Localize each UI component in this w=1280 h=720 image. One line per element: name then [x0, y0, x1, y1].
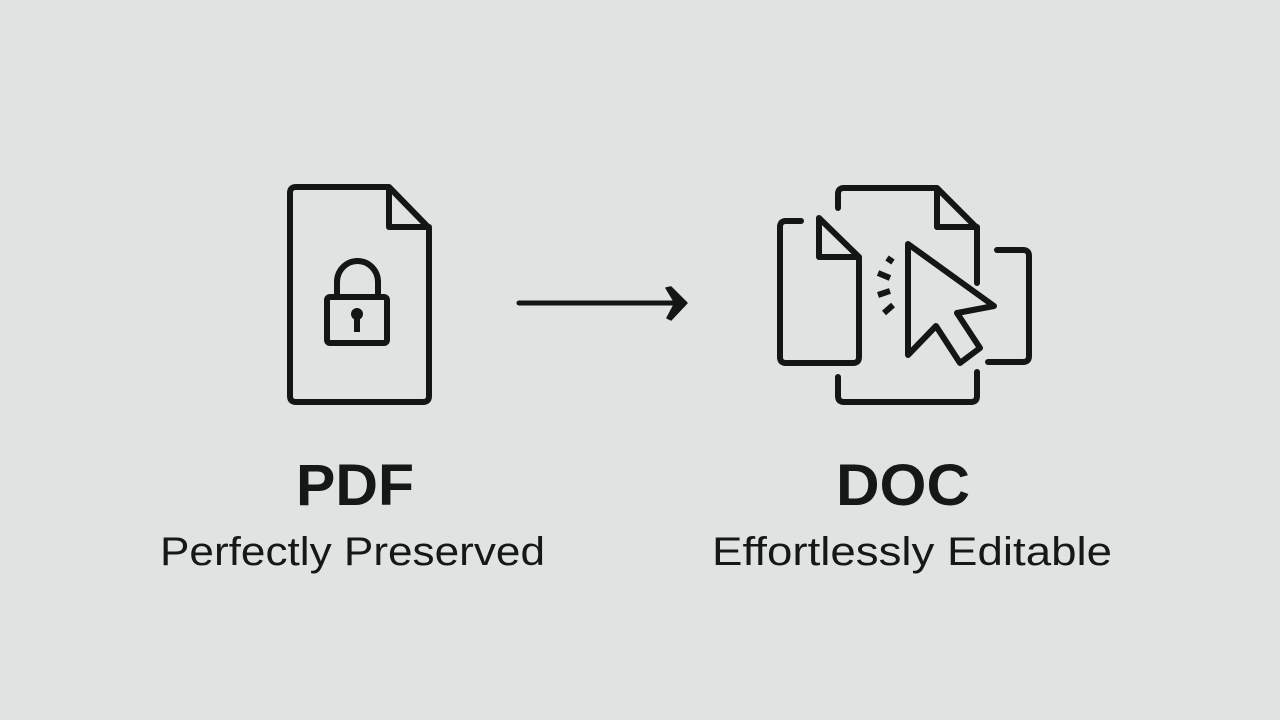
click ticks: [878, 258, 893, 313]
text: Perfectly Preserved: Perfectly Preserved: [160, 530, 545, 574]
heading: DOC: DOC: [836, 453, 970, 518]
arrow: PDF to DOC: [519, 287, 687, 320]
back document bottom: [838, 372, 977, 402]
front document: [780, 218, 859, 363]
icon: locked PDF document: [290, 187, 429, 402]
panel: PDF: [160, 187, 545, 574]
heading: PDF: PDF: [296, 453, 414, 518]
icon: mouse cursor: [908, 244, 994, 363]
icon: padlock: [327, 261, 387, 343]
icon: editable documents with cursor: [780, 188, 1029, 402]
text: Effortlessly Editable: Effortlessly Editable: [712, 530, 1112, 574]
panel: DOC: [712, 188, 1112, 574]
right bracket: [988, 250, 1029, 362]
back document top: [838, 188, 977, 283]
